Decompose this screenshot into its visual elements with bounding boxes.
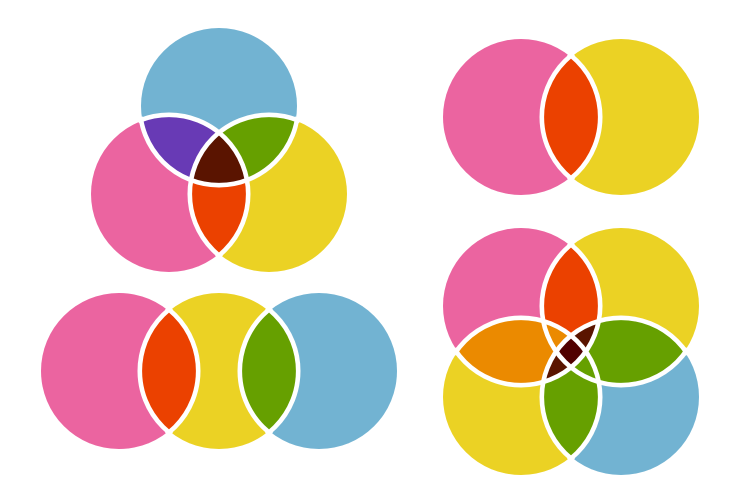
circle: yellow [141, 293, 297, 449]
circle: pink [443, 39, 599, 195]
overlap: top yellow and blue, green [588, 320, 683, 383]
circle: yellow bottom left [443, 319, 599, 475]
overlap: bottom yellow and blue, green [544, 370, 598, 456]
circle: yellow top right [543, 228, 699, 384]
overlap: pink and yellow, red-orange [192, 183, 246, 252]
four-circle Venn diagram [442, 227, 700, 476]
overlap: yellow and blue, green [242, 312, 296, 430]
three-circle Venn diagram [90, 27, 348, 273]
circle: pink [41, 293, 197, 449]
overlap: blue and pink, purple [144, 117, 216, 177]
three-circle chain diagram [40, 292, 398, 450]
overlap: pink and yellow, red-orange [142, 312, 196, 430]
overlap: all four, darkest [560, 339, 582, 364]
white outlines inside overlap [540, 54, 602, 180]
circle: pink left [91, 116, 247, 272]
overlap: blue and yellow, green [222, 117, 294, 177]
circle: pink top left [443, 228, 599, 384]
circle: blue [241, 293, 397, 449]
overlap: pink, top yellow, blue, brown [574, 324, 596, 348]
circle: blue bottom right [543, 319, 699, 475]
overlap: pink, bottom yellow, blue, brown [546, 356, 568, 378]
white outlines inside overlaps [138, 308, 300, 434]
white outlines inside overlaps [455, 244, 687, 460]
two-circle Venn diagram [442, 38, 700, 196]
white outlines inside overlaps [138, 112, 300, 256]
overlap: pink and bottom yellow, orange [459, 320, 554, 383]
circle: blue top [141, 28, 297, 184]
overlap: pink and top yellow, red-orange [544, 248, 598, 333]
overlap: all three, dark brown [194, 136, 244, 183]
overlap: pink, top yellow, bottom yellow, orange [443, 319, 599, 475]
overlap: red-orange [544, 58, 598, 176]
circle: yellow [543, 39, 699, 195]
circle: yellow right [191, 116, 347, 272]
